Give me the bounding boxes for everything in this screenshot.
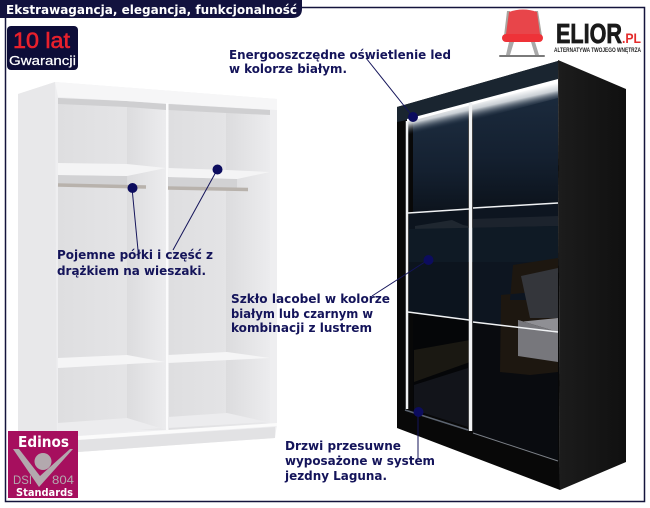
white open wardrobe bbox=[18, 82, 277, 453]
warranty badge: 10 lat bbox=[13, 28, 70, 53]
callout text: shelves bbox=[57, 248, 213, 278]
callout text: sliding doors bbox=[284, 439, 435, 483]
right door glass bbox=[473, 80, 558, 460]
callout text: sliding doors: wyposażone w system bbox=[285, 454, 435, 468]
right bay interior bbox=[168, 104, 270, 430]
badge: Edinos standards: Edinos bbox=[18, 433, 69, 451]
callout text: lighting: w kolorze białym. bbox=[229, 62, 347, 76]
callout text: sliding doors: Drzwi przesuwne bbox=[285, 439, 401, 453]
left bay interior bbox=[58, 98, 166, 430]
callout text: glass: białym lub czarnym w bbox=[231, 307, 373, 321]
callout text: shelves: drążkiem na wieszaki. bbox=[57, 264, 206, 278]
front frame bbox=[397, 61, 560, 490]
logo: Elior bbox=[499, 10, 642, 57]
callout text: lighting: Energooszczędne oświetlenie led bbox=[229, 48, 451, 62]
black wardrobe bbox=[397, 60, 626, 490]
callout dots bbox=[128, 112, 434, 417]
bottom board and plinth bbox=[58, 413, 277, 452]
door rails bbox=[407, 103, 558, 431]
badge: Edinos standards: DSI bbox=[13, 473, 32, 487]
wardrobe carcass bbox=[18, 82, 277, 453]
logo: Elior: .PL bbox=[622, 30, 641, 46]
callout text: shelves: Pojemne półki i część z bbox=[57, 248, 213, 262]
mountain and horizon reflection bbox=[409, 216, 558, 262]
LED light strip bbox=[407, 79, 558, 136]
top board bbox=[55, 82, 277, 110]
callout text: glass: kombinacji z lustrem bbox=[231, 321, 372, 335]
central partition bbox=[166, 103, 168, 430]
badge: Edinos standards bbox=[8, 431, 78, 499]
hanging rails bbox=[58, 185, 248, 190]
warranty badge bbox=[7, 26, 78, 70]
header bar: Ekstrawagancja, elegancja, funkcjonalność bbox=[6, 3, 297, 17]
callout text: glass bbox=[231, 292, 390, 335]
reflected lounge chair bbox=[500, 258, 558, 375]
warranty badge: Gwarancji bbox=[9, 53, 76, 68]
top board bbox=[397, 61, 558, 122]
callout text: glass: Szkło lacobel w kolorze bbox=[231, 292, 390, 306]
bottom track bbox=[405, 410, 558, 461]
lower shelves bbox=[58, 352, 270, 368]
logo text: ELIOR bbox=[556, 18, 622, 49]
side panel bbox=[558, 60, 626, 490]
badge: Edinos standards: Standards bbox=[16, 486, 73, 499]
callout text: sliding doors: jezdny Laguna. bbox=[284, 469, 387, 483]
upper shelves bbox=[58, 163, 270, 189]
callout text: lighting bbox=[229, 48, 451, 76]
badge: Edinos standards: 804 bbox=[52, 473, 74, 487]
left door glass bbox=[409, 106, 470, 427]
callout lines bbox=[132, 58, 428, 458]
icon: chair bbox=[499, 10, 545, 57]
